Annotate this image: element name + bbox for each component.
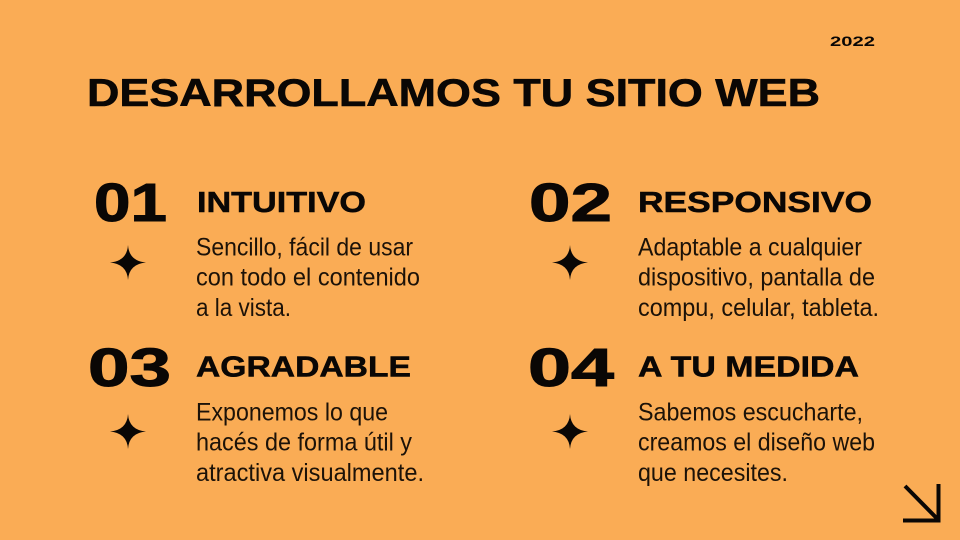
text: responsivo description: Adaptable a cualquier [638, 234, 862, 262]
panel: a tu medida [528, 338, 875, 487]
number 04: 04 [528, 338, 614, 398]
text: intuitivo description [196, 234, 420, 322]
text: agradable description: Exponemos lo que [196, 398, 388, 426]
heading: agradable: AGRADABLE [196, 352, 411, 384]
number 03: 03 [88, 338, 171, 398]
panel: responsivo [529, 173, 879, 322]
text: responsivo description: dispositivo, pantalla de [638, 264, 875, 292]
icon: sparkle star [552, 414, 588, 449]
number 01: 01 [94, 173, 167, 233]
year label: 2022 [830, 34, 875, 49]
icon: arrow down-right [903, 484, 938, 520]
heading: responsivo: RESPONSIVO [638, 187, 872, 219]
panel: agradable [88, 338, 424, 487]
title: DESARROLLAMOS TU SITIO WEB [87, 72, 820, 115]
heading: a tu medida: A TU MEDIDA [638, 352, 859, 384]
number 02: 02 [529, 173, 612, 233]
text: responsivo description [638, 234, 879, 322]
text: intuitivo description: con todo el contenido [196, 264, 420, 292]
text: agradable description [196, 398, 424, 487]
text: intuitivo description: a la vista. [196, 294, 291, 322]
panel: intuitivo [94, 173, 420, 322]
text: a tu medida description: Sabemos escucharte, [638, 398, 863, 426]
text: agradable description: atractiva visualmente. [196, 459, 424, 487]
icon: sparkle star [552, 245, 588, 280]
heading: intuitivo: INTUITIVO [197, 187, 366, 219]
icon: sparkle star [110, 245, 146, 280]
text: a tu medida description: que necesites. [638, 459, 788, 487]
text: agradable description: hacés de forma útil y [196, 428, 412, 456]
text: a tu medida description [638, 398, 875, 487]
icon: sparkle star [110, 414, 146, 449]
text: responsivo description: compu, celular, tableta. [638, 294, 879, 322]
text: a tu medida description: creamos el diseño web [638, 428, 875, 456]
text: intuitivo description: Sencillo, fácil de usar [196, 234, 413, 262]
